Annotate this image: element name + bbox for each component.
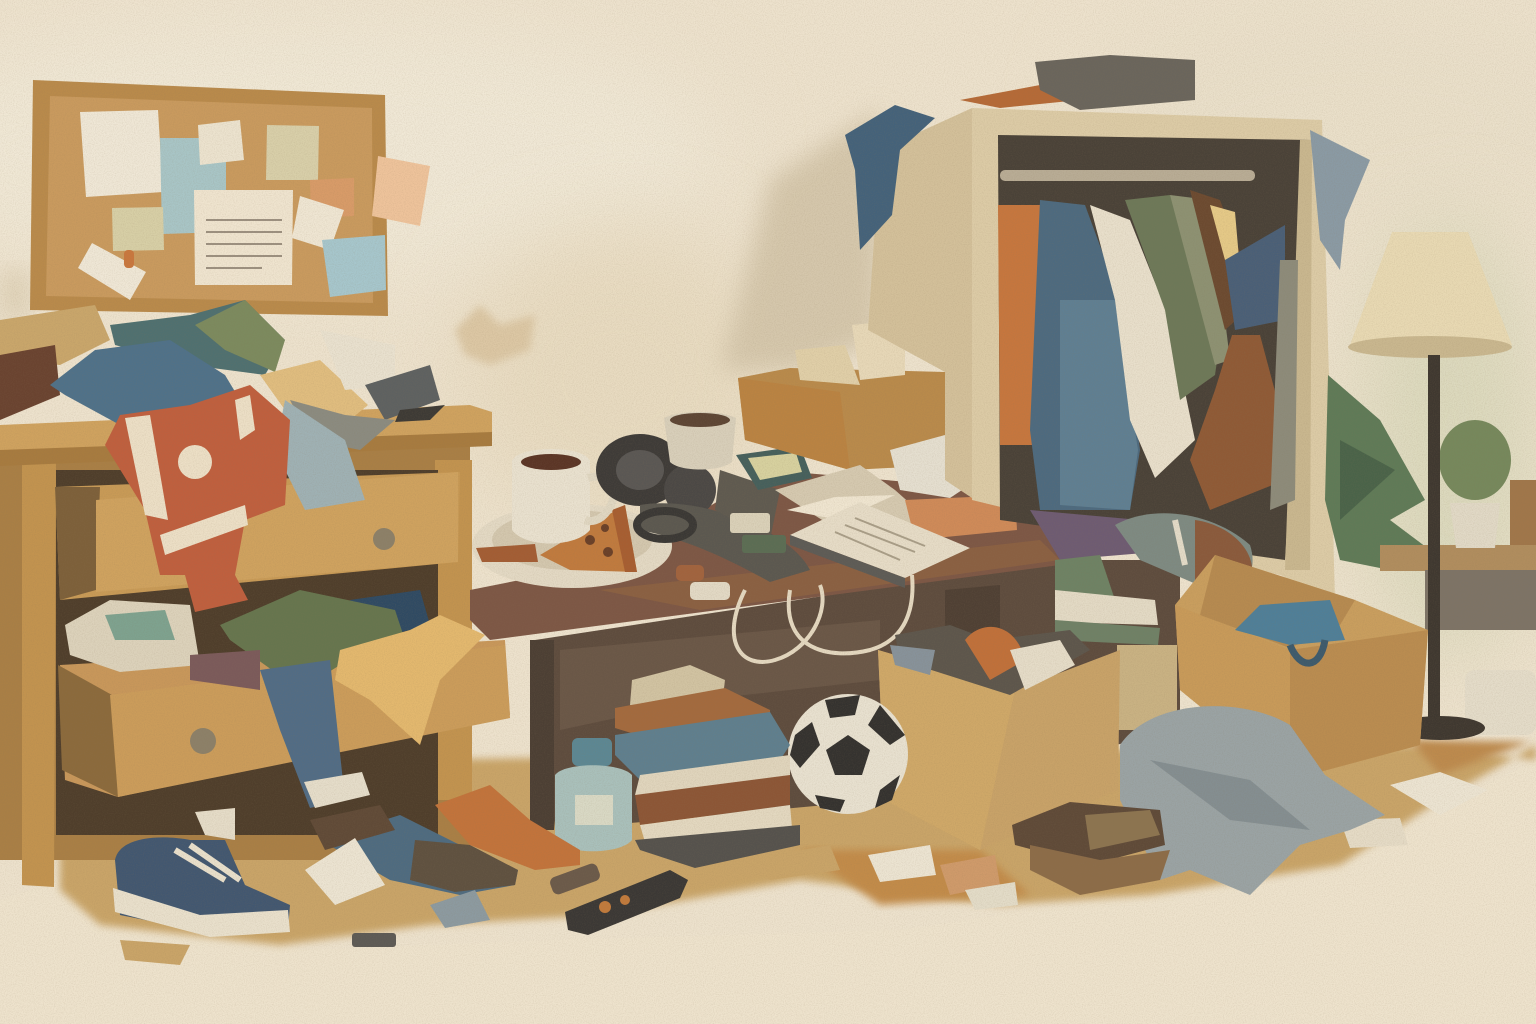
hanging clothes <box>998 190 1298 510</box>
brown shirt <box>1190 190 1258 330</box>
note: lower left <box>78 243 146 300</box>
dresser body <box>0 440 470 860</box>
slippers <box>310 805 518 895</box>
grey coat <box>1270 260 1298 510</box>
note: orange <box>310 178 354 218</box>
note: peach <box>372 156 430 226</box>
books right of desk <box>1055 555 1177 730</box>
note: light blue <box>322 235 386 297</box>
note: pale <box>292 196 344 250</box>
striped sweater <box>105 385 290 612</box>
shoe on wardrobe floor <box>1115 513 1253 593</box>
upper drawer <box>55 472 460 600</box>
under-desk shadow <box>535 560 1180 830</box>
note: green <box>112 207 164 251</box>
floor lamp <box>1348 232 1512 740</box>
cork board <box>30 80 430 316</box>
orange box <box>905 495 1017 540</box>
folded clothes pile <box>1012 802 1170 895</box>
lower shelf clothes <box>1030 510 1180 560</box>
paper bag <box>878 625 1120 850</box>
soccer ball <box>788 694 908 814</box>
clothes pile on dresser <box>0 300 445 612</box>
clothes on lower drawer <box>65 590 485 808</box>
desk books <box>676 435 1017 600</box>
note: small top <box>198 120 244 165</box>
cable <box>734 575 913 662</box>
note: blue <box>160 138 226 234</box>
floor papers <box>120 772 1488 965</box>
navy sweater <box>1225 225 1285 330</box>
coffee mug <box>512 449 614 544</box>
note: main lined <box>194 190 293 285</box>
plate and pizza <box>472 504 672 588</box>
laptop notebook <box>790 502 970 578</box>
cardboard box on desk <box>738 320 945 470</box>
note: top left <box>80 110 163 197</box>
gadget <box>736 446 812 490</box>
small mug <box>664 412 736 470</box>
desk <box>470 470 1060 830</box>
clothes on wardrobe <box>845 55 1370 270</box>
brown bag <box>1190 335 1285 510</box>
remote control <box>565 870 688 935</box>
white shirt <box>1090 205 1195 478</box>
wardrobe <box>868 108 1335 600</box>
right cardboard box <box>1175 555 1428 780</box>
grey green shirt <box>1170 195 1230 365</box>
dresser <box>0 405 510 887</box>
book stack <box>615 665 800 868</box>
stapler <box>890 435 962 498</box>
orange shoe <box>435 785 580 870</box>
headphones <box>596 434 810 582</box>
blue jacket <box>1030 200 1140 510</box>
plant <box>1325 375 1430 570</box>
note: olive <box>266 125 319 180</box>
side shelf with potted plant <box>1380 420 1536 735</box>
dresser top <box>0 405 492 465</box>
floor <box>0 740 1536 1024</box>
spray bottle <box>555 738 632 851</box>
sneaker <box>113 837 290 937</box>
green shirt <box>1125 195 1220 400</box>
orange shirt <box>998 205 1085 445</box>
grey blanket <box>1120 706 1385 895</box>
lower drawer <box>58 640 510 797</box>
